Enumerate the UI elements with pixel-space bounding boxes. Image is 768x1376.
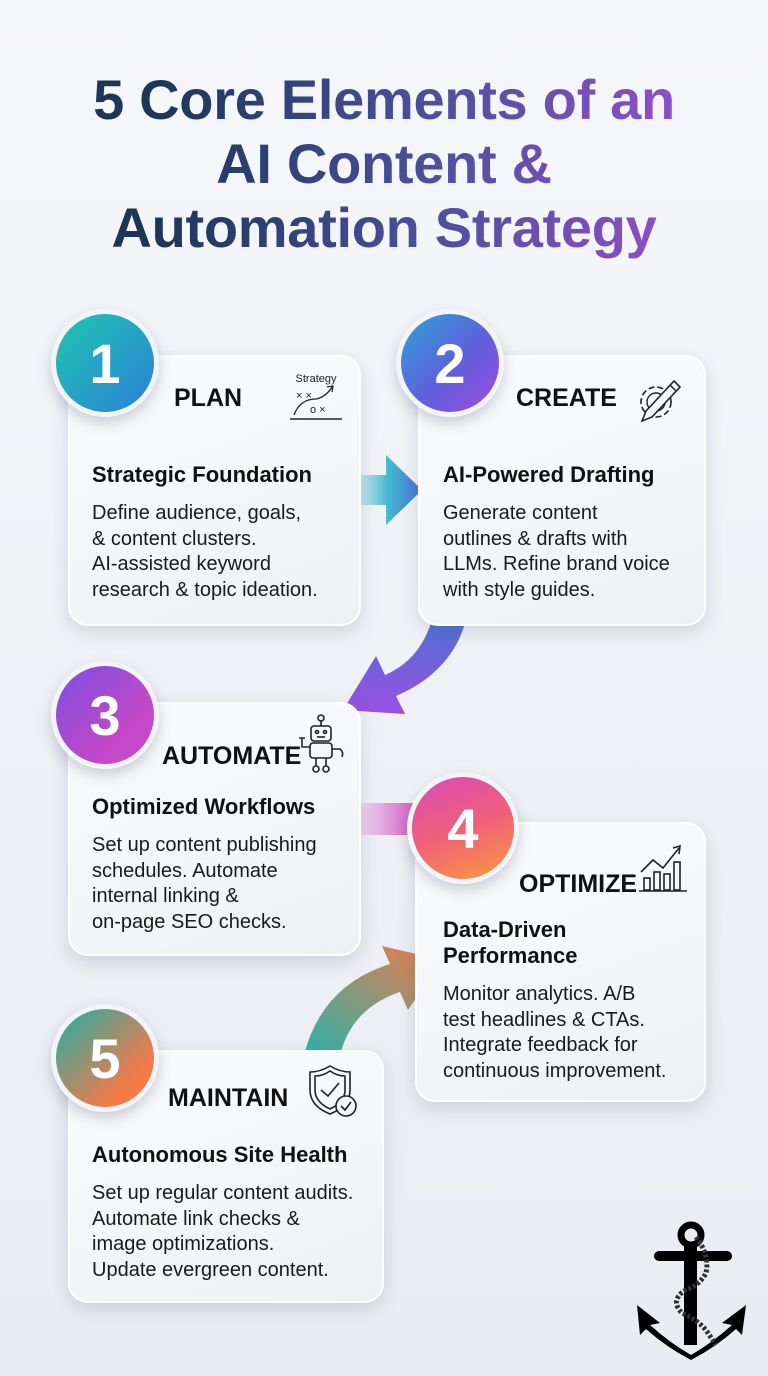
body: research & topic ideation. xyxy=(92,578,318,600)
body xyxy=(92,502,318,600)
body: image optimizations. xyxy=(92,1233,274,1255)
body: schedules. Automate xyxy=(92,860,278,882)
badge 1 xyxy=(51,309,159,417)
icon: strategy: Strategy xyxy=(296,373,337,385)
body: Update evergreen content. xyxy=(92,1258,329,1280)
badge 2 xyxy=(396,309,504,417)
icon: strategy xyxy=(290,373,342,420)
icon: robot xyxy=(299,714,344,773)
title xyxy=(0,68,768,260)
heading: Optimized Workflows xyxy=(92,794,315,819)
body: & content clusters. xyxy=(92,528,257,550)
badge 4: 4 xyxy=(447,796,479,860)
panel: create xyxy=(418,355,706,626)
body: Set up regular content audits. xyxy=(92,1182,353,1204)
label: create: CREATE xyxy=(516,384,617,412)
arrow 2 to 3 xyxy=(343,620,466,714)
body: Monitor analytics. A/B xyxy=(443,983,635,1005)
badge 5 xyxy=(51,1004,159,1112)
body: on-page SEO checks. xyxy=(92,910,287,932)
body: LLMs. Refine brand voice xyxy=(443,553,670,575)
label: automate: AUTOMATE xyxy=(162,742,301,770)
body: test headlines & CTAs. xyxy=(443,1008,645,1030)
body: Set up content publishing xyxy=(92,834,317,856)
body xyxy=(443,502,670,600)
title: AI Content & xyxy=(216,132,552,195)
body: internal linking & xyxy=(92,885,239,907)
badge 1: 1 xyxy=(89,332,121,394)
badge 5: 5 xyxy=(89,1026,121,1090)
panel: maintain xyxy=(68,1050,384,1303)
badge 4 xyxy=(407,772,519,884)
body: continuous improvement. xyxy=(443,1060,666,1082)
label: optimize: OPTIMIZE xyxy=(519,870,637,898)
badge 3 xyxy=(51,661,159,769)
badge 3: 3 xyxy=(89,684,121,746)
badge 2: 2 xyxy=(434,332,466,394)
arrow 1 to 2 xyxy=(355,455,422,525)
body: Define audience, goals, xyxy=(92,502,301,524)
connector 3 to 4 xyxy=(356,803,416,835)
body: Automate link checks & xyxy=(92,1208,300,1230)
icon: shield check xyxy=(309,1065,357,1117)
body: Generate content xyxy=(443,502,598,524)
panel: plan xyxy=(68,355,361,626)
label: maintain: MAINTAIN xyxy=(168,1084,288,1112)
body xyxy=(443,983,666,1082)
heading xyxy=(443,917,578,968)
icon: anchor xyxy=(637,1222,746,1360)
body: Integrate feedback for xyxy=(443,1034,638,1056)
arrow 5 to 4 xyxy=(304,946,442,1055)
panel: optimize xyxy=(415,822,706,1102)
title: Automation Strategy xyxy=(111,196,656,259)
body: outlines & drafts with xyxy=(443,528,628,550)
body xyxy=(92,834,317,932)
heading: AI-Powered Drafting xyxy=(443,462,654,487)
title: 5 Core Elements of an xyxy=(93,68,675,131)
heading: Strategic Foundation xyxy=(92,462,312,487)
body xyxy=(92,1182,353,1280)
icon: growth chart xyxy=(639,844,687,892)
icon: gear pencil xyxy=(640,380,681,422)
heading: Data-Driven xyxy=(443,917,566,942)
body: AI-assisted keyword xyxy=(92,553,271,575)
heading: Autonomous Site Health xyxy=(92,1142,347,1167)
panel: automate xyxy=(68,702,361,956)
icon: strategy: × × xyxy=(296,390,312,402)
label: plan: PLAN xyxy=(174,384,242,412)
body: with style guides. xyxy=(443,578,595,600)
heading: Performance xyxy=(443,943,578,968)
icon: strategy: o × xyxy=(310,404,326,416)
